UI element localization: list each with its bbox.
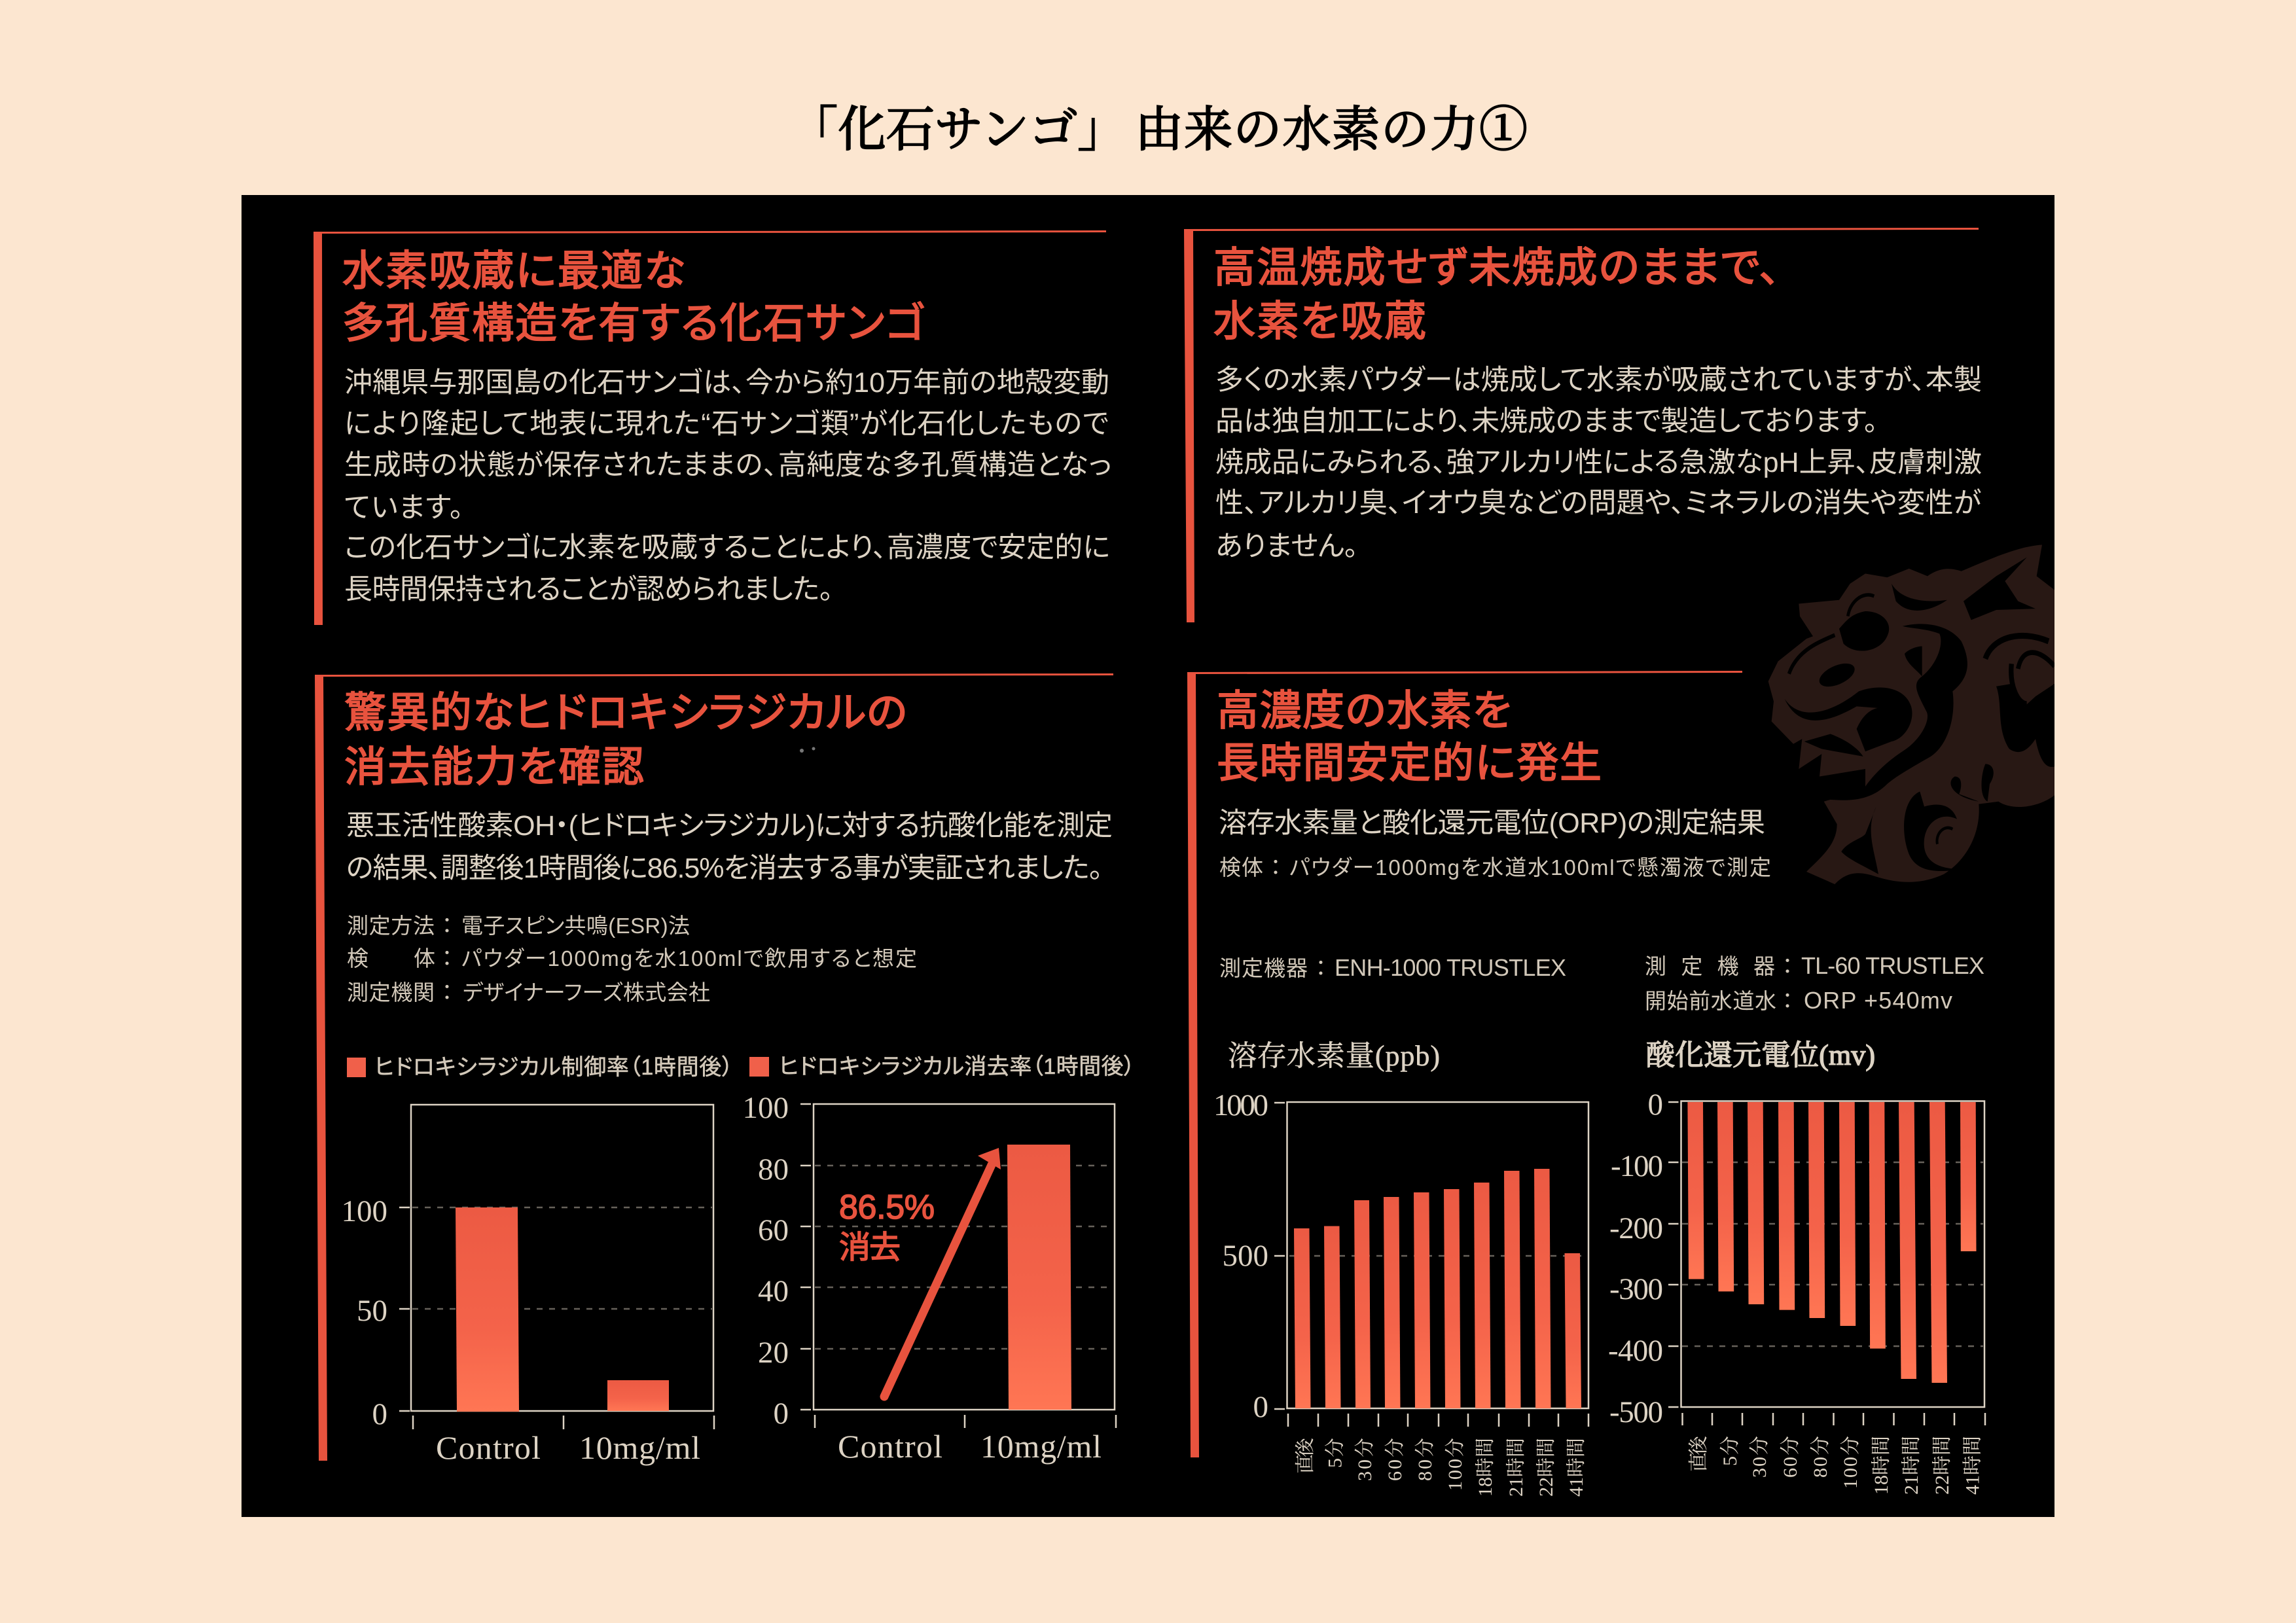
- heading: 多孔質構造を有する化石サンゴ: [342, 300, 925, 347]
- chart title: dissolved hydrogen: 溶存水素量(ppb): [1228, 1040, 1440, 1072]
- chart: elimination rate: 10mg/ml: [980, 1428, 1102, 1465]
- x axis labels: 22時間: [1931, 1436, 1953, 1495]
- chart: elimination rate: 0: [774, 1397, 789, 1431]
- chart: control rate: 100: [342, 1194, 387, 1228]
- x axis labels: 21時間: [1505, 1438, 1527, 1497]
- body text: 多くの水素パウダーは焼成して水素が吸蔵されていますが、本製: [1215, 365, 1982, 396]
- body text: 長時間保持されることが認められました。: [344, 574, 833, 605]
- black main panel: [242, 195, 2054, 1517]
- legend: [347, 1054, 1135, 1080]
- measurement notes: 電子スピン共鳴(ESR)法: [461, 914, 690, 938]
- x axis labels: 直後: [1688, 1435, 1710, 1472]
- heading: 高濃度の水素を: [1217, 687, 1511, 734]
- x axis labels: 18時間: [1475, 1438, 1496, 1497]
- x axis labels: 22時間: [1535, 1438, 1557, 1497]
- device note right: ORP +540mv: [1804, 987, 1952, 1014]
- measurement notes: [347, 914, 917, 1005]
- device note right: [1645, 952, 1984, 1014]
- chart: elimination rate: Control: [838, 1428, 942, 1465]
- chart: dissolved hydrogen: 1000: [1213, 1088, 1268, 1122]
- chart title: ORP: 酸化還元電位(mv): [1646, 1039, 1875, 1071]
- accent frame: [1184, 228, 1979, 622]
- chart: ORP: -200: [1609, 1211, 1663, 1245]
- chart: dissolved hydrogen: 0: [1253, 1390, 1268, 1424]
- body text: 性、アルカリ臭、イオウ臭などの問題や、ミネラルの消失や変性が: [1215, 488, 1981, 519]
- chart: dissolved hydrogen: [1213, 1088, 1588, 1497]
- chart: elimination rate: 60: [758, 1213, 789, 1247]
- device note right: ：: [1782, 954, 1793, 978]
- body text: により隆起して地表に現れた“石サンゴ類”が化石化したもので: [344, 408, 1109, 440]
- device note right: TL-60 TRUSTLEX: [1801, 952, 1984, 979]
- body text: [344, 367, 1111, 605]
- sample note: ：: [1270, 855, 1281, 880]
- device note right: ：: [1782, 989, 1793, 1013]
- measurement notes: 測定方法: [347, 914, 435, 938]
- device note left: ：: [1316, 956, 1326, 980]
- speck: [800, 747, 816, 753]
- body text: 焼成品にみられる、強アルカリ性による急激なpH上昇、皮膚刺激: [1215, 447, 1982, 478]
- sample note: パウダー1000mgを水道水100mlで懸濁液で測定: [1289, 855, 1771, 880]
- measurement notes: 検: [347, 946, 368, 971]
- bar: control: [456, 1207, 519, 1412]
- x axis labels: 41時間: [1566, 1438, 1587, 1497]
- chart: control rate: Control: [436, 1429, 541, 1466]
- heading: 水素吸蔵に最適な: [342, 247, 685, 294]
- heading: 消去能力を確認: [344, 743, 644, 791]
- heading: 長時間安定的に発生: [1217, 740, 1602, 787]
- chart: control rate: [342, 1105, 714, 1466]
- x axis labels: 80分: [1810, 1436, 1831, 1478]
- chart: control rate: 50: [357, 1294, 387, 1328]
- title: 由来の水素の力①: [1135, 103, 1528, 157]
- accent frame: [314, 230, 1106, 625]
- device note left: 測定機器: [1219, 956, 1308, 980]
- bars: [1687, 1102, 1977, 1383]
- chart: ORP: 0: [1648, 1088, 1663, 1122]
- x axis labels: 5分: [1719, 1436, 1741, 1466]
- callout: 86.5%: 86.5%: [839, 1188, 935, 1226]
- heading: [1217, 687, 1602, 787]
- chart: control rate: 0: [372, 1397, 387, 1431]
- x axis labels: 30分: [1749, 1436, 1770, 1478]
- measurement notes: 体: [414, 946, 435, 971]
- body text: [346, 810, 1113, 884]
- measurement notes: ：: [442, 980, 452, 1005]
- panel: hydroxyl radical: [315, 673, 1135, 1466]
- measurement notes: ：: [442, 914, 452, 938]
- heading: 高温焼成せず未焼成のままで、: [1213, 244, 1780, 291]
- x axis labels: 41時間: [1962, 1436, 1983, 1495]
- panel: high concentration: [1187, 671, 1985, 1497]
- x axis labels: 80分: [1414, 1438, 1436, 1481]
- measurement notes: 測定機関: [347, 980, 435, 1005]
- body text: ありません。: [1215, 531, 1358, 562]
- decorative lion watermark: [1768, 545, 2054, 884]
- title: [789, 103, 1528, 157]
- x axis labels: 100分: [1840, 1436, 1861, 1489]
- callout: 86.5%: [839, 1188, 935, 1265]
- x axis labels: 60分: [1780, 1436, 1801, 1478]
- chart: ORP: -300: [1609, 1272, 1663, 1306]
- body text: 生成時の状態が保存されたままの、高純度な多孔質構造となっ: [344, 450, 1111, 481]
- device note left: [1219, 954, 1566, 981]
- heading: 水素を吸蔵: [1213, 298, 1426, 345]
- device note left: ENH-1000 TRUSTLEX: [1335, 954, 1566, 981]
- body text: の結果、調整後1時間後に86.5%を消去する事が実証されました。: [346, 853, 1103, 884]
- body text: ています。: [344, 492, 463, 524]
- chart: ORP: -100: [1611, 1149, 1663, 1183]
- arrow: [884, 1148, 1001, 1397]
- measurement notes: ：: [442, 946, 452, 971]
- x axis labels: 直後: [1295, 1437, 1316, 1474]
- x axis labels: 60分: [1384, 1438, 1406, 1481]
- body text: 沖縄県与那国島の化石サンゴは、今から約10万年前の地殻変動: [344, 367, 1109, 399]
- body text: [1215, 365, 1982, 562]
- chart: elimination rate: [742, 1091, 1116, 1465]
- x axis labels: 18時間: [1871, 1436, 1892, 1495]
- body text: 品は独自加工により、未焼成のままで製造しております。: [1215, 406, 1878, 437]
- chart: ORP: -400: [1608, 1334, 1663, 1368]
- measurement notes: パウダー1000mgを水100mlで飲用すると想定: [461, 946, 917, 971]
- body text: この化石サンゴに水素を吸蔵することにより、高濃度で安定的に: [344, 532, 1110, 563]
- x axis labels: 21時間: [1901, 1436, 1922, 1495]
- heading: 驚異的なヒドロキシラジカルの: [344, 689, 907, 736]
- chart: control rate: 10mg/ml: [579, 1429, 700, 1466]
- legend: ヒドロキシラジカル消去率（1時間後）: [779, 1054, 1135, 1079]
- legend: ヒドロキシラジカル制御率（1時間後）: [374, 1055, 733, 1080]
- device note right: 開始前水道水: [1645, 989, 1776, 1013]
- chart: elimination rate: 100: [742, 1091, 789, 1125]
- bars: [1294, 1169, 1581, 1408]
- subheading: 溶存水素量と酸化還元電位(ORP)の測定結果: [1219, 808, 1765, 839]
- heading: [344, 689, 907, 791]
- bar: 10mg/ml: [607, 1380, 669, 1411]
- device note right: 測 定 機 器: [1645, 954, 1775, 978]
- chart: elimination rate: 40: [758, 1274, 789, 1308]
- accent frame: [1187, 671, 1742, 1457]
- callout: 86.5%: 消去: [839, 1230, 901, 1265]
- chart: ORP: [1608, 1088, 1985, 1495]
- x axis labels: [1295, 1437, 1587, 1497]
- heading: [342, 247, 925, 347]
- x axis labels: 30分: [1354, 1438, 1376, 1481]
- measurement notes: デザイナーフーズ株式会社: [463, 980, 710, 1005]
- x axis labels: 5分: [1325, 1438, 1346, 1468]
- infographic canvas: [242, 104, 2054, 1517]
- chart: elimination rate: 20: [758, 1336, 789, 1370]
- heading: [1213, 244, 1780, 345]
- chart: ORP: -500: [1609, 1395, 1663, 1429]
- bar: 10mg/ml: [1007, 1145, 1071, 1410]
- chart: dissolved hydrogen: 500: [1223, 1239, 1268, 1273]
- x axis labels: [1688, 1435, 1983, 1495]
- chart: elimination rate: 80: [758, 1152, 789, 1186]
- panel: unfired: [1184, 228, 1982, 622]
- panel: porous structure: [314, 230, 1111, 625]
- body text: 悪玉活性酸素OH・(ヒドロキシラジカル)に対する抗酸化能を測定: [346, 810, 1113, 842]
- title: 「化石サンゴ」: [789, 103, 1126, 157]
- x axis labels: 100分: [1444, 1438, 1466, 1491]
- sample note: 検体: [1219, 855, 1263, 880]
- accent frame: [315, 673, 1113, 1461]
